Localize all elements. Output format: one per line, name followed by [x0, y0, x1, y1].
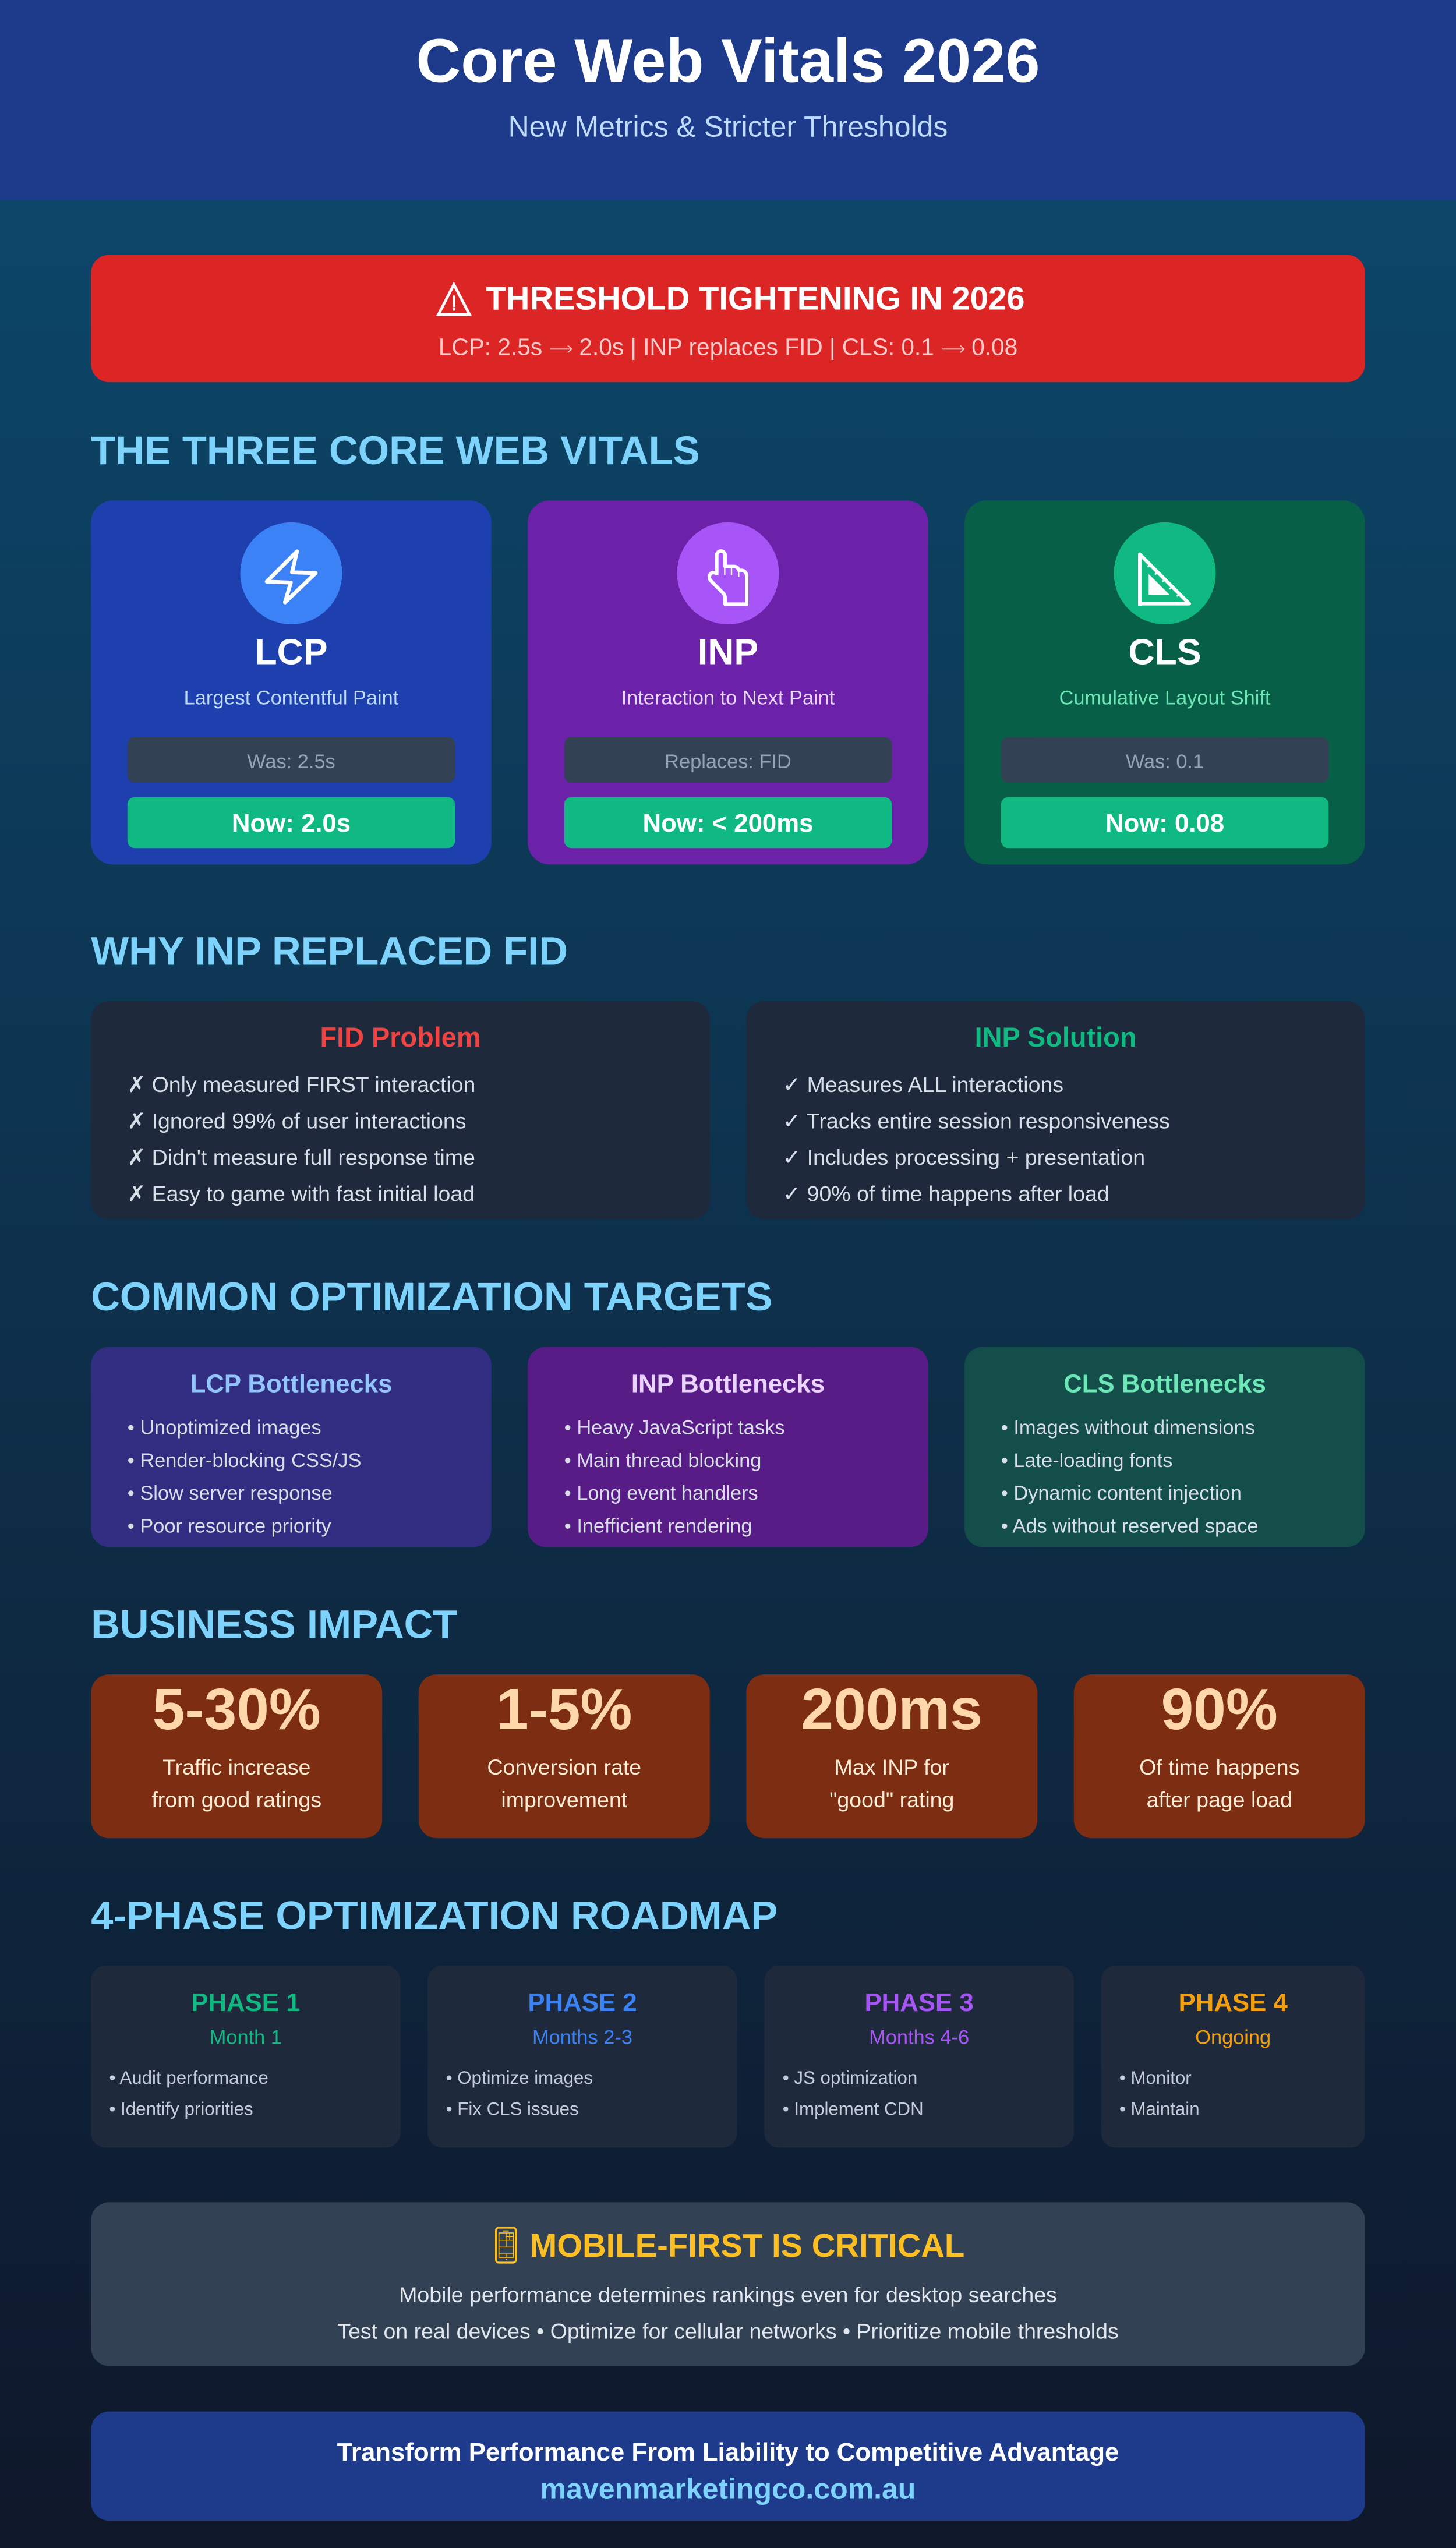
LCP bottlenecks list: • Render-blocking CSS/JS	[128, 1450, 361, 1472]
panel: phase 4: PHASE 4	[1179, 1988, 1288, 2017]
panel: phase 2: PHASE 2	[528, 1988, 637, 2017]
LCP bottlenecks heading: LCP Bottlenecks	[190, 1370, 392, 1398]
stat: traffic increase	[91, 1674, 382, 1838]
INP name: INP	[698, 632, 758, 673]
INP bottlenecks heading: INP Bottlenecks	[631, 1370, 825, 1398]
INP bottlenecks list: • Long event handlers	[564, 1482, 758, 1504]
footer url: mavenmarketingco.com.au	[540, 2473, 916, 2505]
FID problem list: ✗ Easy to game with fast initial load	[128, 1181, 475, 1206]
CLS name: CLS	[1129, 632, 1201, 673]
arrow: CLS change	[942, 345, 964, 352]
INP new value: Now: < 200ms	[642, 809, 814, 837]
header banner	[0, 0, 1456, 200]
icon: warning triangle	[439, 284, 469, 314]
panel: phase 3: • Implement CDN	[783, 2098, 924, 2119]
LCP name: LCP	[255, 632, 327, 673]
INP solution list	[783, 1072, 1170, 1206]
heading: common optimization targets: COMMON OPTIMIZATION TARGETS	[91, 1274, 772, 1319]
LCP previous value	[128, 737, 455, 783]
panel: phase 1: • Identify priorities	[109, 2098, 253, 2119]
alert: threshold tightening	[91, 255, 1365, 382]
CLS bottlenecks list: • Images without dimensions	[1001, 1416, 1255, 1439]
panel: INP bottlenecks	[528, 1347, 928, 1547]
stat: time after load: Of time happens	[1139, 1755, 1299, 1779]
alert heading: THRESHOLD TIGHTENING IN 2026	[486, 280, 1025, 316]
INP solution list: ✓ Includes processing + presentation	[783, 1145, 1145, 1169]
panel: phase 2	[427, 1966, 737, 2148]
alert detail: 0.08	[971, 333, 1017, 360]
LCP bottlenecks list: • Slow server response	[128, 1482, 333, 1504]
FID problem list: ✗ Didn't measure full response time	[128, 1145, 475, 1169]
stat: time after load	[1074, 1674, 1365, 1838]
CLS new value	[1001, 797, 1328, 848]
INP previous value: Replaces: FID	[665, 751, 791, 773]
stat: traffic increase: from good ratings	[151, 1787, 321, 1812]
panel: INP card	[528, 500, 928, 864]
panel: phase 1: Month 1	[210, 2026, 282, 2048]
panel: phase 3: • JS optimization	[783, 2068, 917, 2088]
CLS full name: Cumulative Layout Shift	[1059, 687, 1271, 709]
INP bottlenecks list: • Main thread blocking	[564, 1450, 761, 1472]
alert detail: 2.0s | INP replaces FID | CLS: 0.1	[579, 333, 934, 360]
title: Core Web Vitals 2026	[416, 26, 1040, 96]
CLS previous value: Was: 0.1	[1126, 751, 1204, 773]
icon: triangle ruler	[1114, 522, 1216, 624]
panel: phase 3: Months 4-6	[869, 2026, 969, 2048]
heading: the three core web vitals: THE THREE CORE WEB VITALS	[91, 428, 700, 473]
panel: phase 4: Ongoing	[1195, 2026, 1271, 2048]
stat: conversion rate: 1-5%	[496, 1677, 632, 1742]
heading: business impact: BUSINESS IMPACT	[91, 1602, 457, 1646]
FID problem list	[128, 1072, 475, 1206]
panel: LCP card	[91, 500, 492, 864]
footer tagline: Transform Performance From Liability to Competitive Advantage	[337, 2438, 1119, 2466]
icon: pointing hand	[677, 522, 779, 624]
panel: LCP bottlenecks	[91, 1347, 492, 1547]
panel: CLS bottlenecks	[964, 1347, 1365, 1547]
panel: CLS card	[964, 500, 1365, 864]
FID heading: FID Problem	[320, 1022, 480, 1052]
INP bottlenecks list: • Inefficient rendering	[564, 1515, 752, 1537]
stat: conversion rate: Conversion rate	[487, 1755, 641, 1779]
mobile line one: Mobile performance determines rankings even for desktop searches	[399, 2282, 1057, 2307]
LCP bottlenecks list: • Poor resource priority	[128, 1515, 332, 1537]
icon: lightning bolt	[240, 522, 342, 624]
CLS new value: Now: 0.08	[1105, 809, 1224, 837]
stat: time after load: after page load	[1147, 1787, 1292, 1812]
INP bottlenecks list: • Heavy JavaScript tasks	[564, 1416, 784, 1439]
INP bottlenecks list	[564, 1416, 784, 1537]
icon: mobile phone	[496, 2228, 516, 2263]
stat: max INP: Max INP for	[835, 1755, 949, 1779]
heading: why INP replaced FID: WHY INP REPLACED FID	[91, 928, 568, 973]
panel: phase 2: • Optimize images	[446, 2068, 593, 2088]
INP previous value	[564, 737, 892, 783]
subtitle: New Metrics & Stricter Thresholds	[508, 110, 948, 143]
INP heading: INP Solution	[975, 1022, 1136, 1052]
panel: FID problem	[91, 1001, 710, 1220]
INP full name: Interaction to Next Paint	[621, 687, 835, 709]
CLS previous value	[1001, 737, 1328, 783]
LCP bottlenecks list: • Unoptimized images	[128, 1416, 321, 1439]
panel: phase 1: PHASE 1	[191, 1988, 300, 2017]
panel: mobile-first callout	[91, 2202, 1365, 2366]
stat: max INP: 200ms	[801, 1677, 983, 1742]
LCP full name: Largest Contentful Paint	[184, 687, 399, 709]
panel: phase 4: • Maintain	[1119, 2098, 1200, 2119]
stat: conversion rate: improvement	[501, 1787, 628, 1812]
stat: time after load: 90%	[1161, 1677, 1278, 1742]
mobile heading: MOBILE-FIRST IS CRITICAL	[529, 2227, 964, 2264]
INP solution list: ✓ 90% of time happens after load	[783, 1181, 1109, 1206]
INP new value	[564, 797, 892, 848]
stat: max INP: "good" rating	[829, 1787, 954, 1812]
LCP new value	[128, 797, 455, 848]
FID problem list: ✗ Ignored 99% of user interactions	[128, 1108, 466, 1133]
panel: phase 3: PHASE 3	[865, 1988, 974, 2017]
panel: phase 2: Months 2-3	[532, 2026, 632, 2048]
footer banner	[91, 2412, 1365, 2521]
INP solution list: ✓ Measures ALL interactions	[783, 1072, 1063, 1097]
alert detail	[439, 333, 1017, 360]
mobile line two: Test on real devices • Optimize for cellular networks • Prioritize mobile thresholds	[337, 2319, 1119, 2344]
CLS bottlenecks list: • Late-loading fonts	[1001, 1450, 1172, 1472]
LCP new value: Now: 2.0s	[232, 809, 351, 837]
CLS bottlenecks list: • Dynamic content injection	[1001, 1482, 1242, 1504]
panel: phase 4	[1101, 1966, 1365, 2148]
arrow: LCP change	[550, 345, 572, 352]
panel: phase 2: • Fix CLS issues	[446, 2098, 579, 2119]
CLS bottlenecks list: • Ads without reserved space	[1001, 1515, 1259, 1537]
panel: INP solution	[746, 1001, 1365, 1220]
stat: traffic increase: 5-30%	[153, 1677, 321, 1742]
panel: phase 1: • Audit performance	[109, 2068, 268, 2088]
alert detail: LCP: 2.5s	[439, 333, 542, 360]
LCP bottlenecks list	[128, 1416, 361, 1537]
panel: phase 3	[764, 1966, 1074, 2148]
panel: phase 1	[91, 1966, 401, 2148]
stat: traffic increase: Traffic increase	[162, 1755, 310, 1779]
CLS bottlenecks heading: CLS Bottlenecks	[1063, 1370, 1266, 1398]
CLS bottlenecks list	[1001, 1416, 1259, 1537]
FID problem list: ✗ Only measured FIRST interaction	[128, 1072, 475, 1097]
stat: max INP	[746, 1674, 1037, 1838]
LCP previous value: Was: 2.5s	[247, 751, 335, 773]
heading: 4-phase optimization roadmap: 4-PHASE OPTIMIZATION ROADMAP	[91, 1893, 778, 1938]
INP solution list: ✓ Tracks entire session responsiveness	[783, 1108, 1170, 1133]
stat: conversion rate	[419, 1674, 710, 1838]
panel: phase 4: • Monitor	[1119, 2068, 1192, 2088]
